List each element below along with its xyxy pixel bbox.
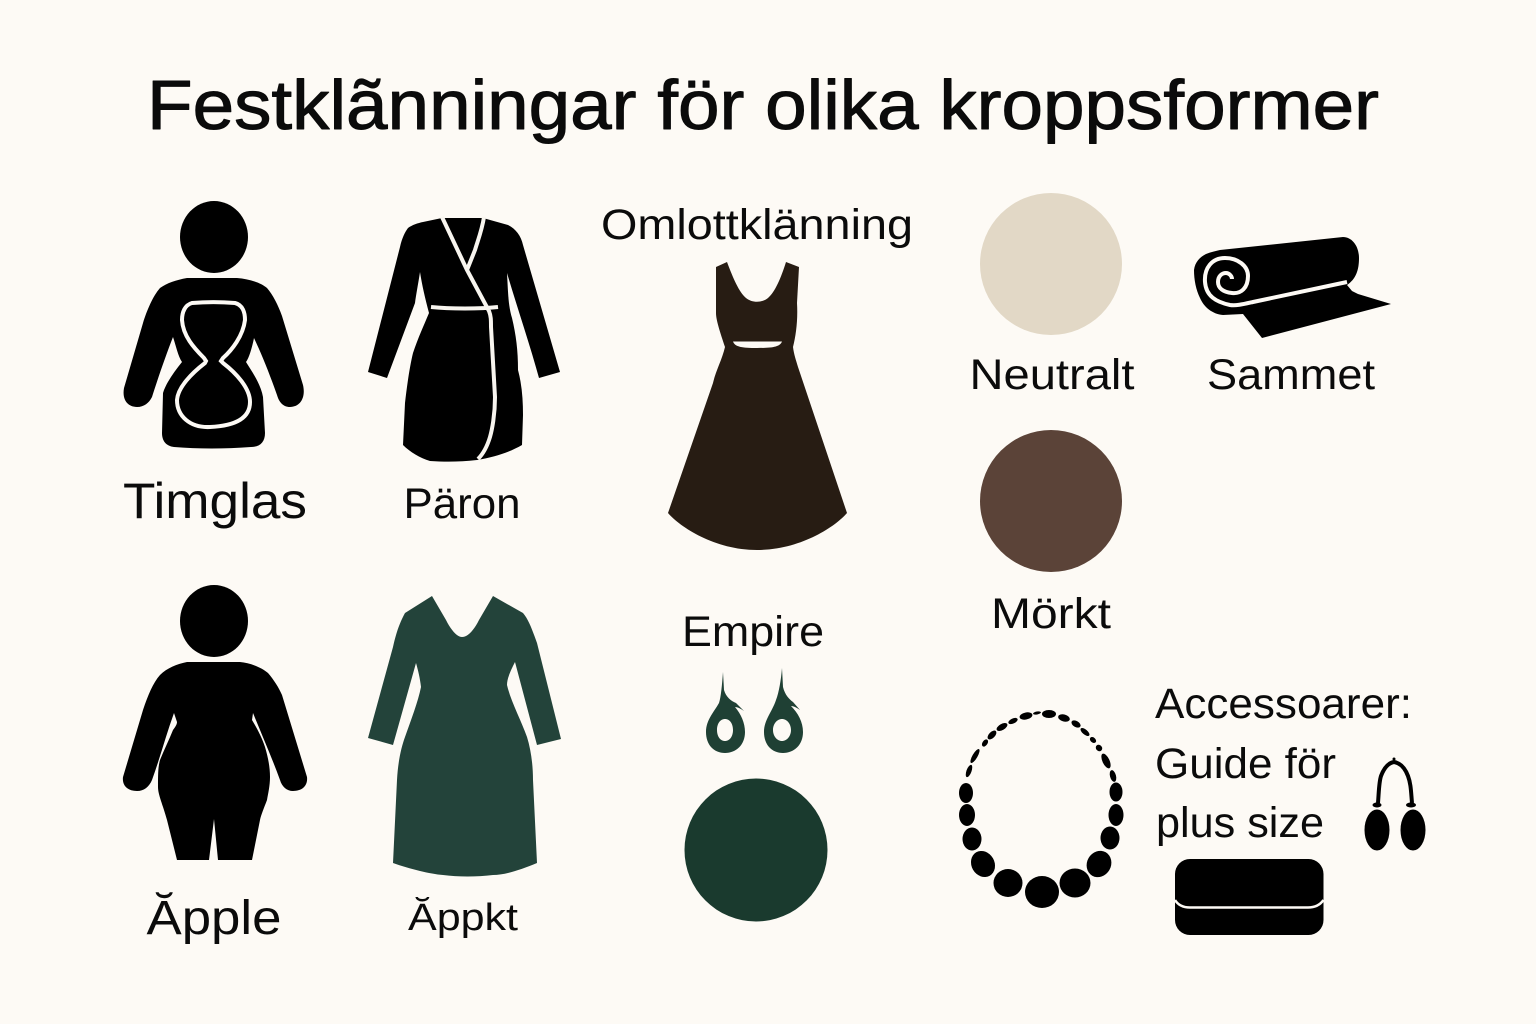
label: Ăpple: Ăpple: [146, 892, 282, 945]
label: Neutralt: Neutralt: [970, 351, 1135, 399]
label: Empire: Empire: [682, 608, 824, 656]
label: Ăppkt: Ăppkt: [408, 896, 518, 939]
icon: velvet roll: [1194, 237, 1391, 338]
swatch: neutral: [980, 193, 1122, 335]
swatch: dark: [980, 430, 1122, 572]
icon: dark wrap dress: [668, 262, 847, 550]
label: Päron: Päron: [404, 480, 520, 528]
icon: black drop earrings: [1364, 758, 1426, 850]
text block: accessories guide: Accessoarer:: [1155, 680, 1412, 728]
text block: accessories guide: [1155, 680, 1412, 847]
icon: wrap coat dress: [368, 217, 560, 462]
title: Festklãnningar för olika kroppsformer: [147, 66, 1379, 144]
icon: green earrings: [706, 668, 803, 753]
label: Timglas: Timglas: [123, 473, 307, 529]
icon: hourglass body: [124, 201, 304, 448]
text block: accessories guide: plus size: [1156, 799, 1324, 847]
icon: clutch bag: [1175, 859, 1324, 935]
swatch: deep green: [684, 778, 828, 922]
label: Sammet: Sammet: [1207, 351, 1375, 399]
icon: green A-line dress: [368, 596, 561, 876]
text block: accessories guide: Guide för: [1155, 740, 1336, 788]
label: Mörkt: Mörkt: [991, 590, 1111, 638]
icon: apple body: [123, 585, 307, 860]
label: Omlottklänning: Omlottklänning: [601, 201, 913, 249]
icon: bead necklace: [959, 710, 1124, 908]
